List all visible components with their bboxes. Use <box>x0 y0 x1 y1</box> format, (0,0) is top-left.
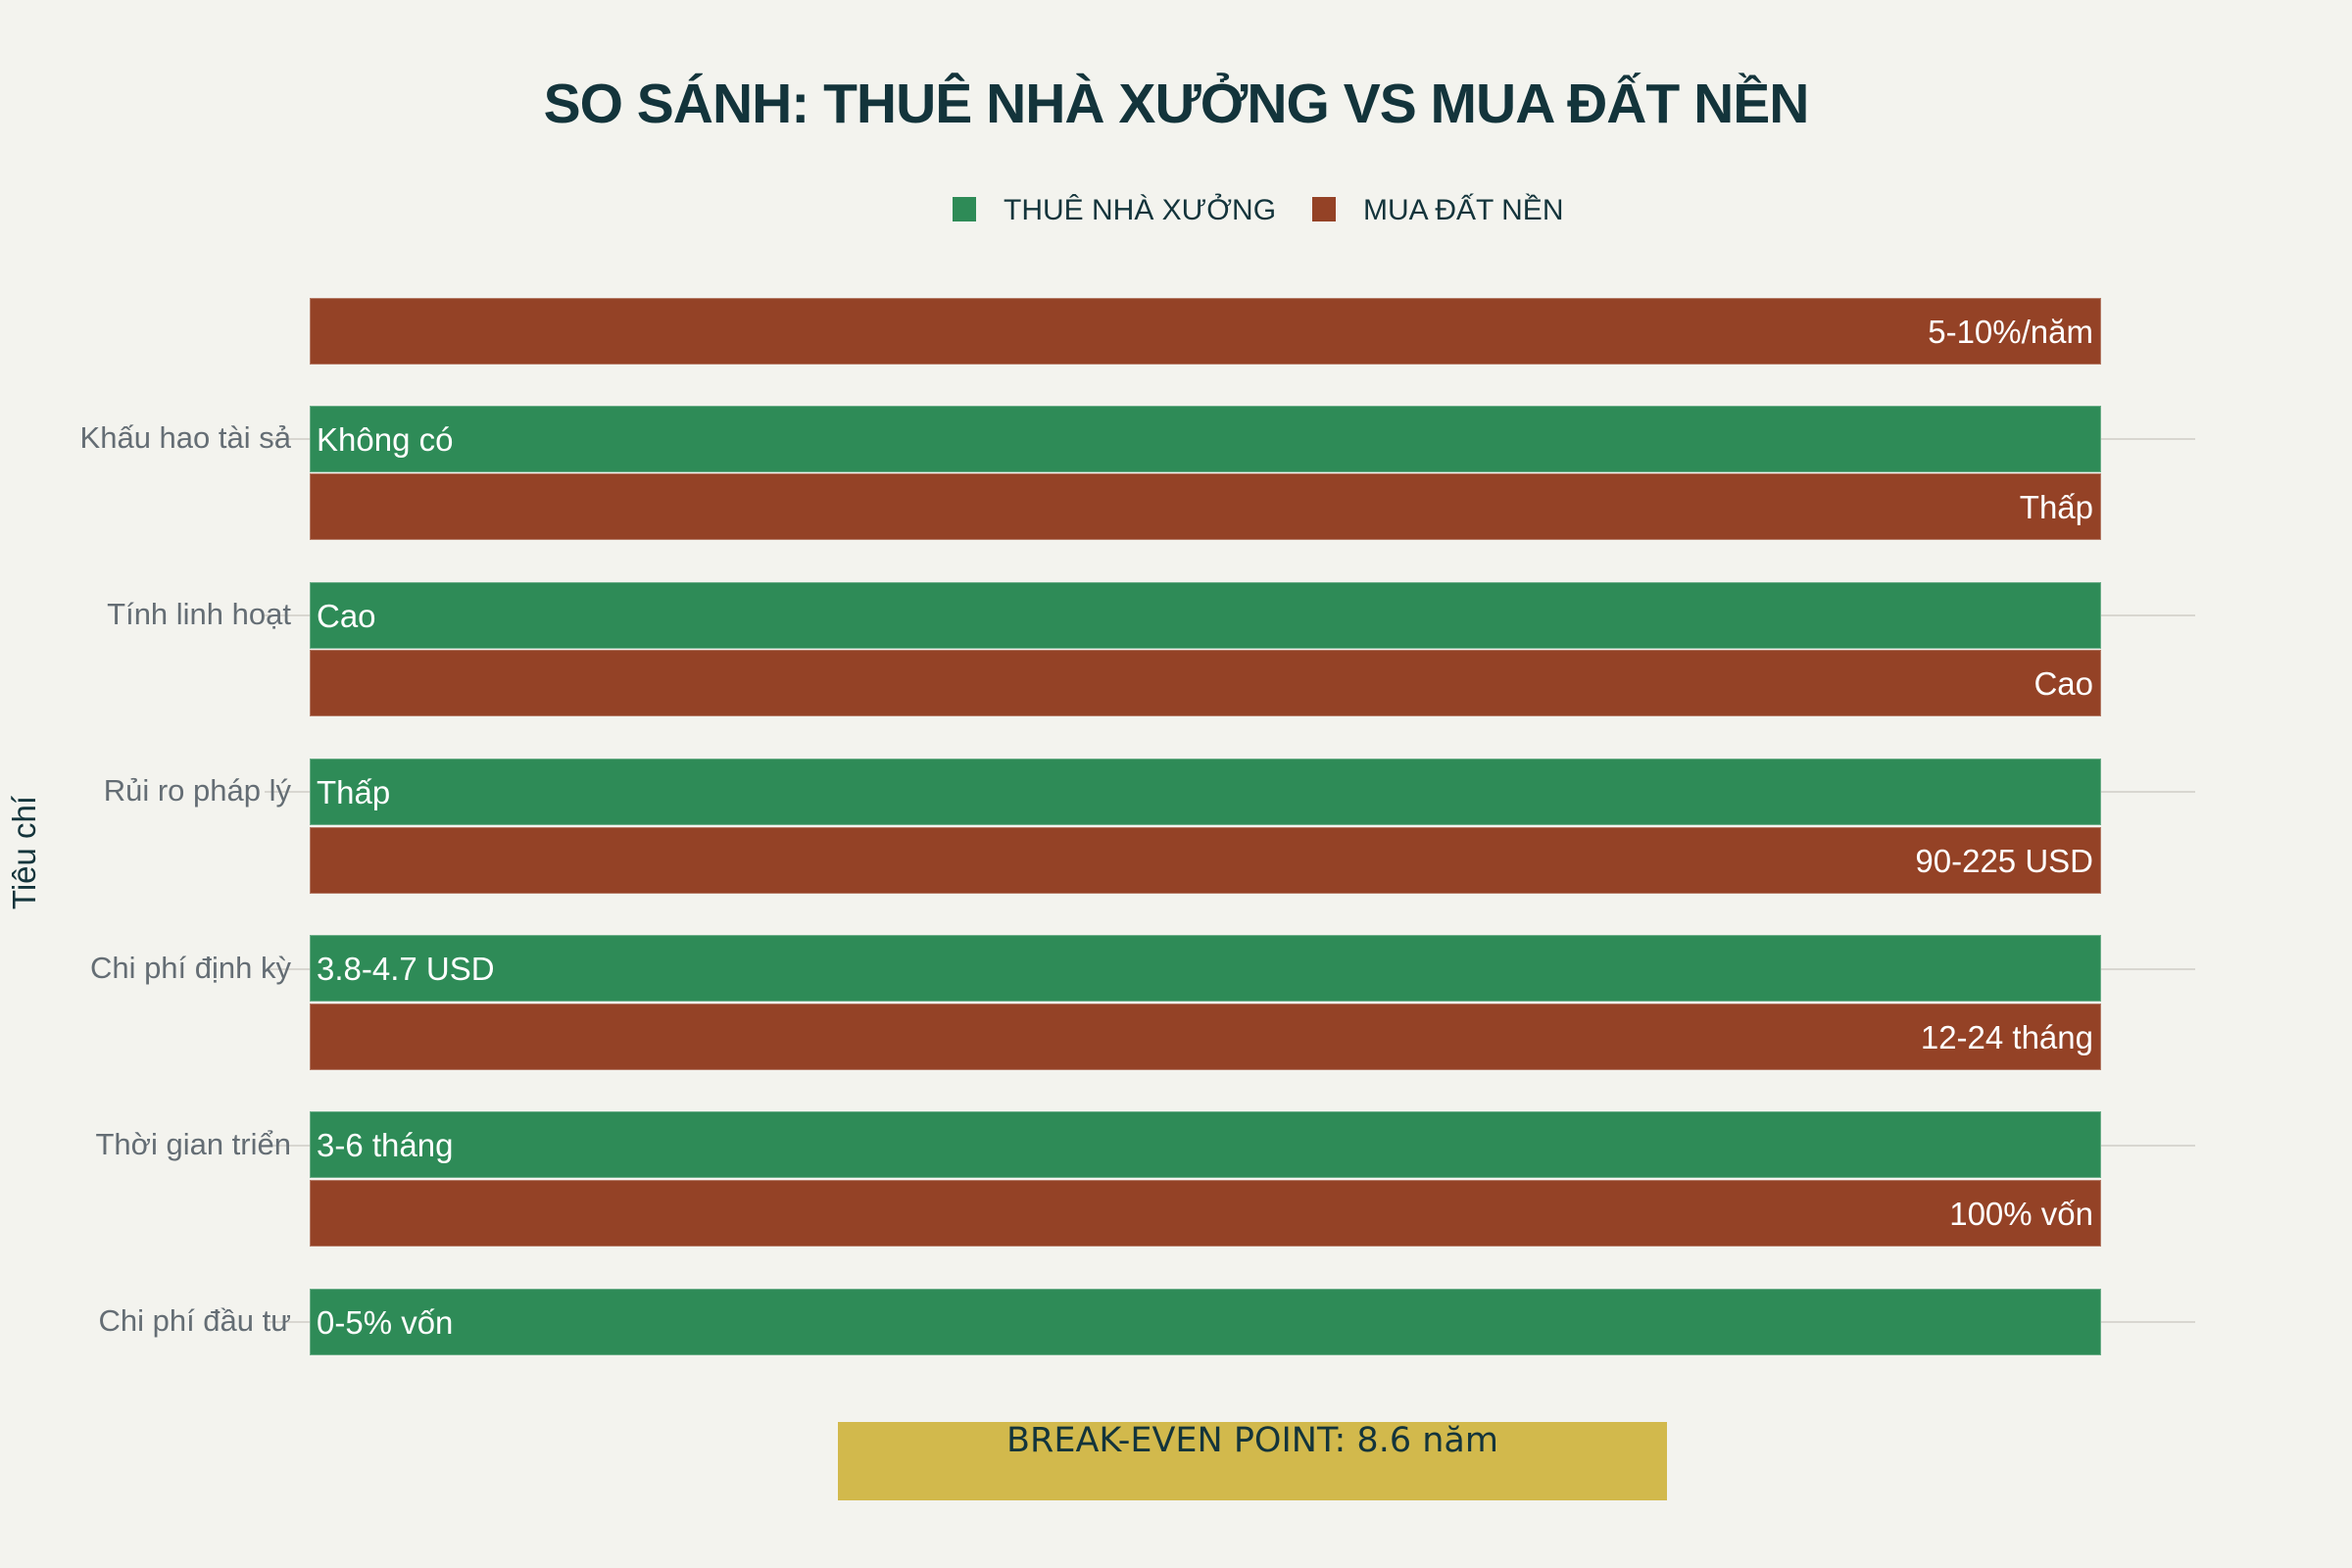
bar chart: Thấp <box>317 774 390 810</box>
bar chart: Không có <box>317 421 453 458</box>
category labels: Chi phí định kỳ <box>90 951 291 985</box>
legend: thuê: THUÊ NHÀ XƯỞNG <box>1004 194 1276 226</box>
bar chart: 12-24 tháng <box>1921 1019 2093 1055</box>
bar chart: Cao <box>317 598 376 634</box>
bar chart: 100% vốn <box>1949 1196 2093 1232</box>
bar chart: 0-5% vốn <box>317 1304 453 1341</box>
category labels: Rủi ro pháp lý <box>104 773 291 808</box>
category labels: Chi phí đầu tư <box>98 1303 291 1338</box>
y axis title: Tiêu chí <box>6 796 42 909</box>
category labels: Khấu hao tài sả <box>80 420 291 455</box>
callout: break-even: BREAK-EVEN POINT: 8.6 năm <box>1006 1421 1498 1460</box>
bar chart: Cao <box>2034 665 2093 702</box>
bar chart: 3-6 tháng <box>317 1127 453 1163</box>
callout: break-even <box>838 1422 1667 1500</box>
bar chart: 90-225 USD <box>1915 843 2093 879</box>
bar chart <box>310 298 2101 1355</box>
legend: mua: MUA ĐẤT NỀN <box>1363 194 1563 226</box>
bar chart: 3.8-4.7 USD <box>317 951 495 987</box>
bar chart: Thấp <box>2020 489 2093 525</box>
category labels: Thời gian triển <box>95 1127 291 1161</box>
category labels: Tính linh hoạt <box>107 597 291 631</box>
bar chart: 5-10%/năm <box>1928 314 2093 350</box>
title: SO SÁNH: THUÊ NHÀ XƯỞNG VS MUA ĐẤT NỀN <box>544 73 1808 135</box>
category labels <box>80 420 291 1338</box>
legend <box>953 194 1563 226</box>
